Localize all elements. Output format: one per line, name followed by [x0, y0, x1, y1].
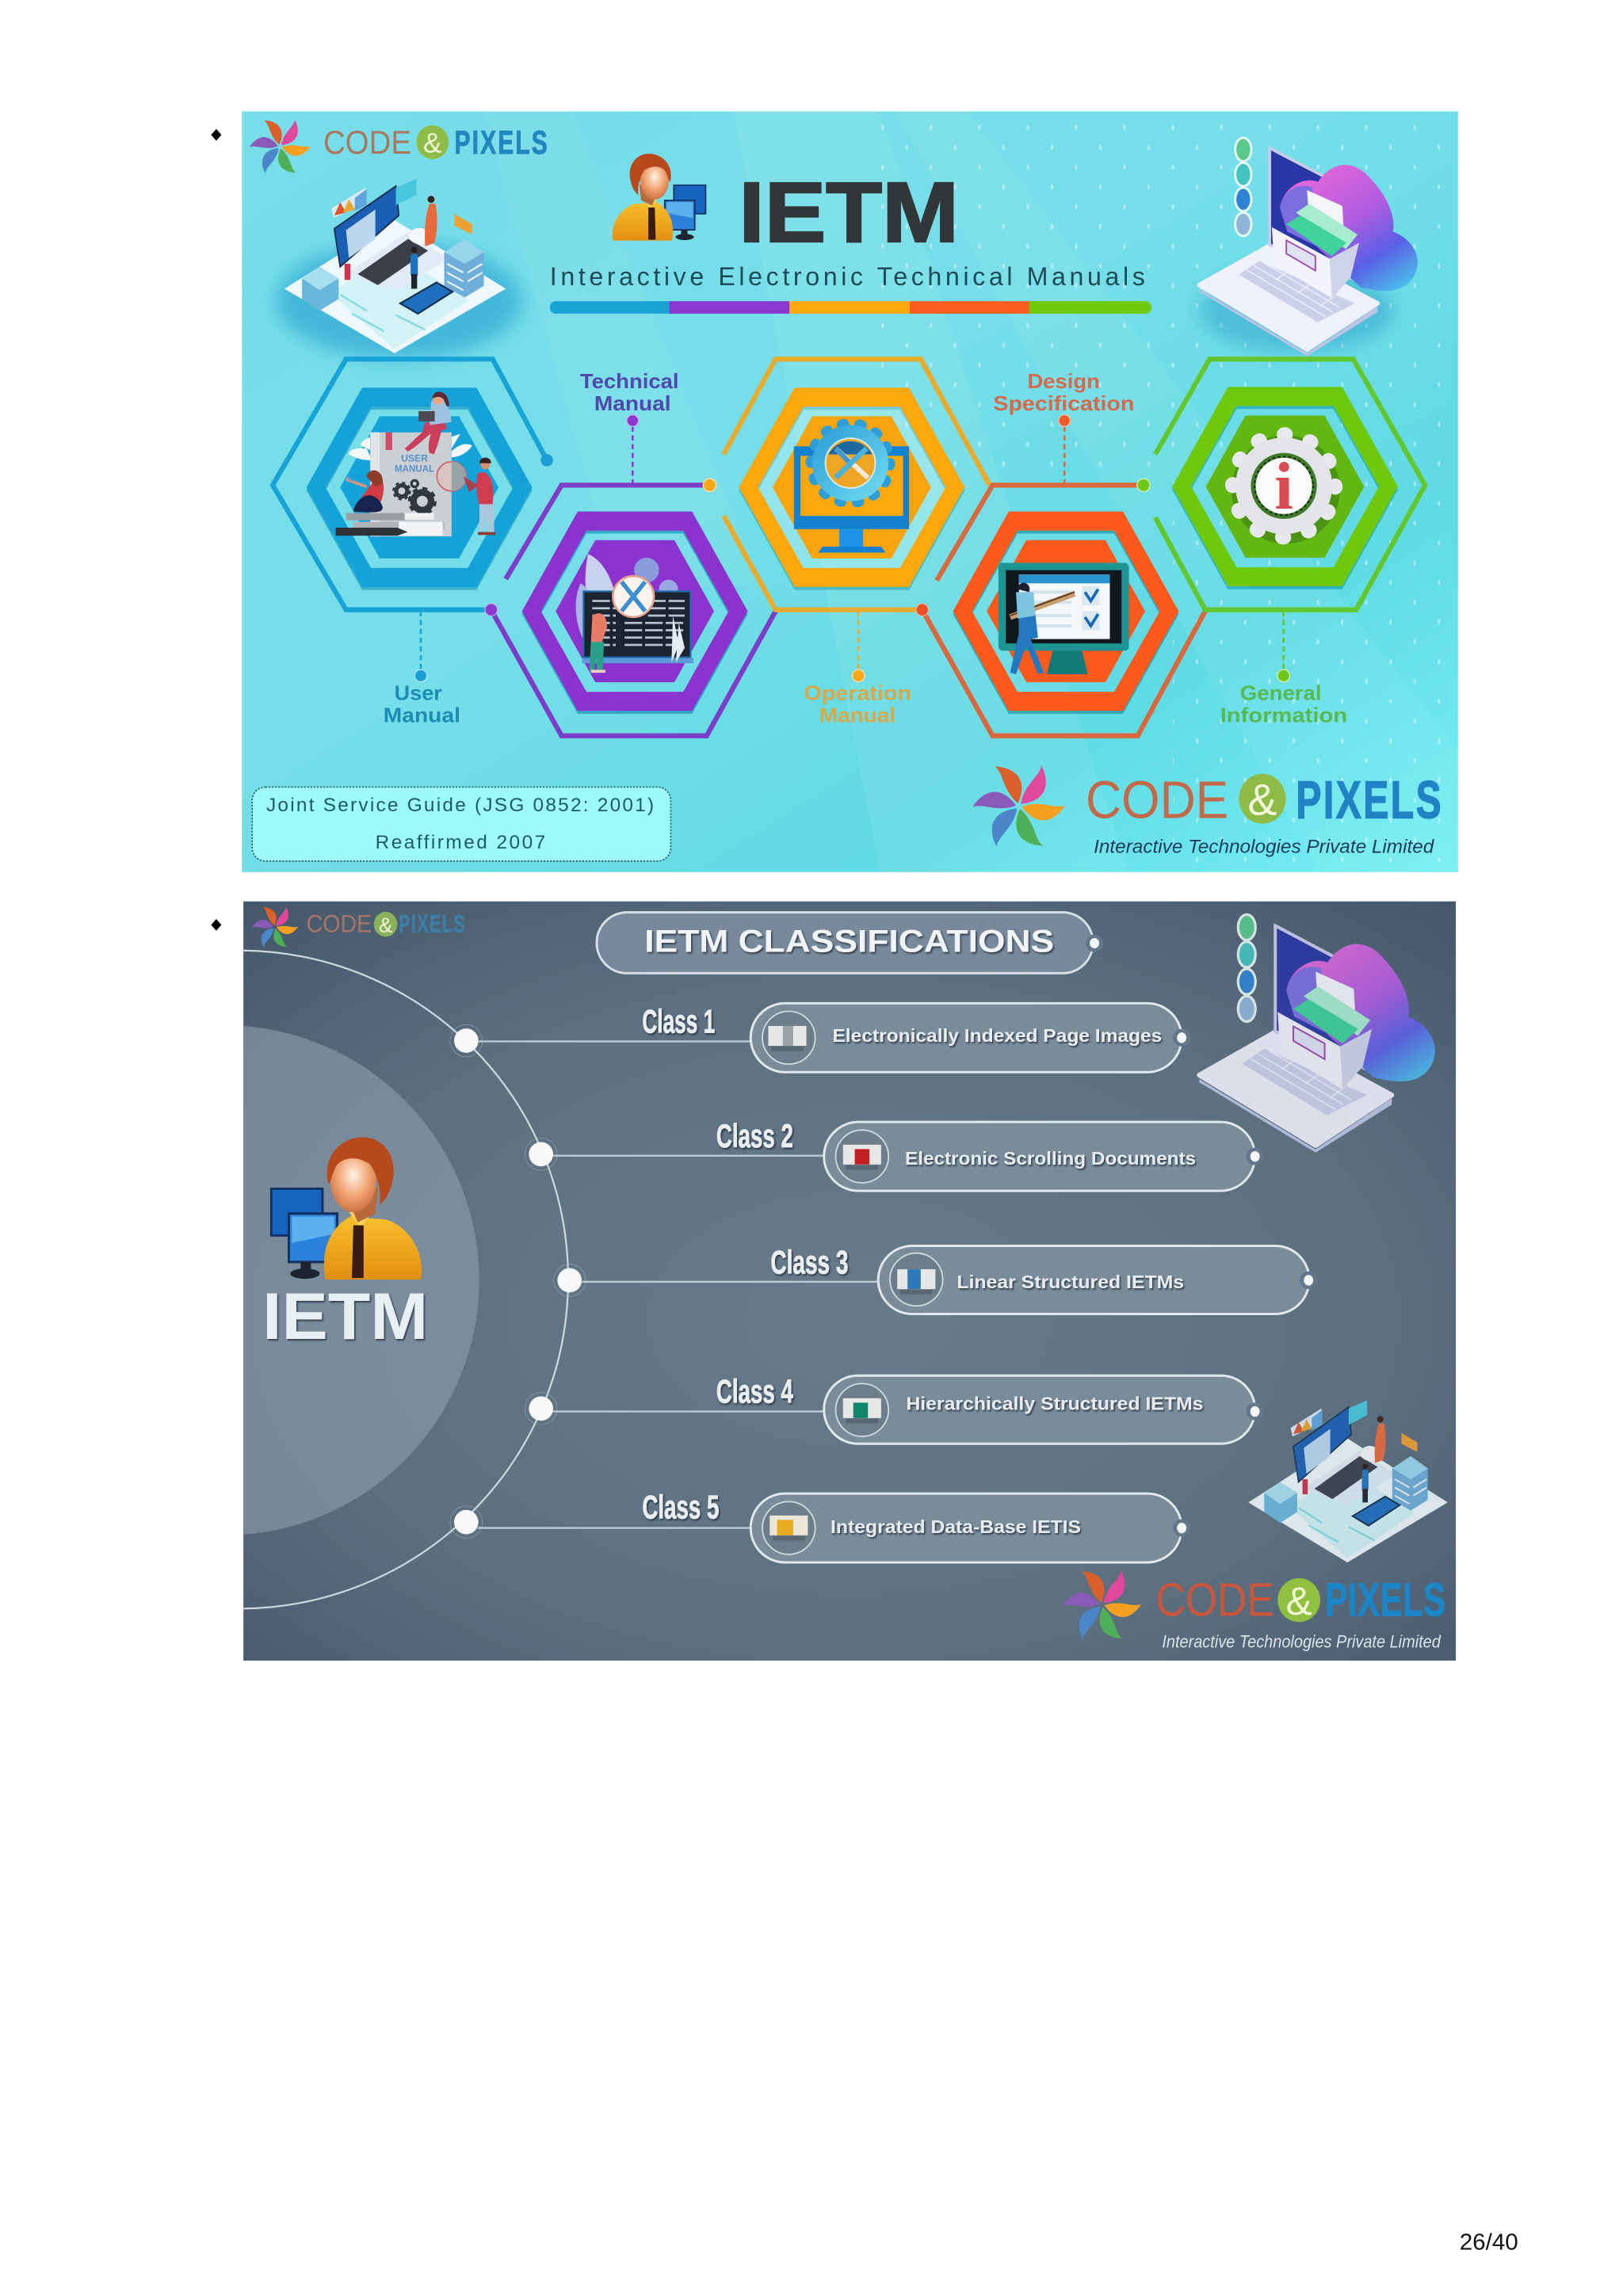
- bullet: first slide: [211, 129, 221, 141]
- bottom logo with tagline: Interactive Technologies Private Limited: [1162, 1631, 1441, 1651]
- callout: operation manual: Manual: [819, 704, 896, 727]
- callout: user manual: User: [395, 682, 442, 704]
- illustration: cloud laptop: [1199, 138, 1418, 357]
- inner circle: [243, 1026, 479, 1535]
- class 1 row: [450, 1002, 1190, 1072]
- shadow: cloud laptop: [1199, 269, 1393, 352]
- colour bar: [550, 301, 1151, 314]
- top-left logo: CODE: [307, 910, 372, 938]
- callout: user manual: Manual: [384, 704, 460, 727]
- callout: general information: [1220, 611, 1347, 727]
- class 1 row: Class 1: [642, 1002, 715, 1039]
- subtitle: Interactive Electronic Technical Manuals: [550, 262, 1145, 291]
- icon: hierarchical structure monitor: [836, 1383, 888, 1436]
- callout: technical manual: [580, 371, 679, 485]
- callout: operation manual: Operation: [804, 682, 911, 704]
- class 1 row: Electronically Indexed Page Images: [832, 1025, 1162, 1046]
- slide background: [243, 902, 1456, 1661]
- callout box: joint service guide: [252, 787, 670, 861]
- heading: IETM: IETM: [262, 1280, 428, 1353]
- figure: man with pencil: [1010, 583, 1075, 674]
- bullet: second slide: [211, 919, 221, 931]
- icon: monitor with gear and tools: [794, 424, 909, 552]
- bottom logo with tagline: &: [1285, 1579, 1312, 1623]
- class 3 row: Linear Structured IETMs: [957, 1272, 1184, 1292]
- callout: general information: Information: [1220, 704, 1347, 727]
- top-left logo: [252, 904, 464, 950]
- class 5 row: Class 5: [642, 1489, 719, 1526]
- illustration: isometric laptop platform: [1248, 1400, 1448, 1562]
- hexagon: operation manual: [739, 387, 964, 590]
- panel: IETM classifications slide: [243, 902, 1456, 1661]
- icon: pinwheel: [250, 116, 311, 177]
- page number: 26/40: [1460, 2230, 1518, 2256]
- bottom logo with tagline: [1063, 1566, 1445, 1651]
- bottom logo with tagline: PIXELS: [1325, 1573, 1445, 1626]
- figure: woman with magnifier: [590, 613, 607, 673]
- icon: integrated database monitor: [762, 1501, 815, 1554]
- class 5 row: [450, 1489, 1190, 1562]
- top-left logo: &: [379, 915, 392, 937]
- class 3 row: [553, 1244, 1317, 1314]
- callout: design specification: [993, 371, 1134, 485]
- bottom logo with tagline: [972, 760, 1442, 858]
- icon: magnifier with wrench: [613, 576, 654, 617]
- shadow: isometric platform: [276, 242, 522, 359]
- icon: gears: [394, 480, 435, 514]
- icon: engineer with monitors: [271, 1137, 422, 1280]
- figure: seated woman: [346, 471, 384, 513]
- bottom logo with tagline: &: [1247, 776, 1277, 825]
- callout: technical manual: Technical: [580, 371, 679, 393]
- callout: design specification: Design: [1027, 371, 1100, 393]
- icon: linear structure monitor: [890, 1253, 943, 1306]
- heading pill: IETM classifications: IETM CLASSIFICATIONS: [644, 925, 1054, 959]
- top-left logo: PIXELS: [455, 124, 548, 161]
- illustration: user manual document with people: USER: [401, 453, 428, 464]
- bottom logo with tagline: CODE: [1156, 1573, 1274, 1627]
- outline: design specification hexagon: [922, 485, 1205, 736]
- figure: man with magnifier: [464, 458, 495, 535]
- panel: IETM overview slide: [242, 112, 1466, 872]
- class 5 row: Integrated Data-Base IETIS: [831, 1516, 1081, 1537]
- callout box: joint service guide: Joint Service Guide (JSG 0852: 2001): [266, 795, 654, 816]
- top-left logo: [250, 116, 548, 177]
- classification arc: [243, 951, 568, 1608]
- outline: technical manual hexagon: [491, 485, 776, 736]
- callout: user manual: [384, 611, 460, 727]
- hexagon: user manual: [307, 387, 533, 590]
- title: IETM: IETM: [739, 165, 959, 260]
- illustration: user manual document with people: MANUAL: [395, 463, 435, 475]
- connector dots: [485, 454, 1150, 616]
- outline: operation manual hexagon: [724, 359, 990, 610]
- top-left logo: &: [423, 128, 441, 158]
- top-left logo: CODE: [323, 124, 411, 161]
- bottom logo with tagline: PIXELS: [1296, 771, 1442, 830]
- class 4 row: Hierarchically Structured IETMs: [906, 1394, 1204, 1414]
- illustration: design checklist monitor: [999, 563, 1129, 674]
- class 2 row: [525, 1117, 1264, 1191]
- icon: pinwheel: [252, 904, 298, 950]
- icon: engineer with monitors: [613, 154, 705, 241]
- slide background: [242, 112, 1458, 872]
- class 3 row: Class 3: [770, 1244, 848, 1281]
- bottom logo with tagline: CODE: [1086, 771, 1228, 830]
- callout: operation manual: [804, 611, 911, 727]
- icon: pinwheel: [1063, 1566, 1141, 1644]
- icon: pinwheel: [972, 760, 1065, 852]
- class 4 row: Class 4: [716, 1372, 793, 1409]
- icon: information gear: [1232, 435, 1340, 543]
- icon: information gear: i: [1274, 449, 1293, 524]
- outline: general information hexagon: [1155, 359, 1425, 610]
- books: [336, 513, 445, 536]
- illustration: cloud laptop: [1199, 914, 1435, 1153]
- hexagon: general information: [1172, 387, 1398, 589]
- outline: user manual hexagon: [273, 359, 547, 610]
- hexagon: technical manual: [522, 512, 748, 714]
- class 4 row: [525, 1372, 1264, 1444]
- callout: general information: General: [1240, 682, 1322, 704]
- icon: indexed page monitor: [762, 1011, 815, 1064]
- icon: scrolling document monitor: [836, 1130, 888, 1183]
- callout box: joint service guide: Reaffirmed 2007: [376, 832, 545, 853]
- top-left logo: PIXELS: [399, 910, 464, 938]
- illustration: user manual document with people: [336, 392, 495, 536]
- hexagon: design specification: [953, 512, 1178, 714]
- bottom logo with tagline: Interactive Technologies Private Limited: [1094, 837, 1434, 858]
- callout: design specification: Specification: [993, 393, 1134, 415]
- class 2 row: Electronic Scrolling Documents: [905, 1148, 1196, 1169]
- figure: woman with laptop: [405, 392, 452, 454]
- heading pill: IETM classifications: [597, 913, 1103, 973]
- callout: technical manual: Manual: [594, 393, 671, 415]
- illustration: isometric laptop platform: [285, 179, 506, 353]
- class 2 row: Class 2: [716, 1117, 793, 1154]
- illustration: technical manual screen and tools: [576, 554, 693, 673]
